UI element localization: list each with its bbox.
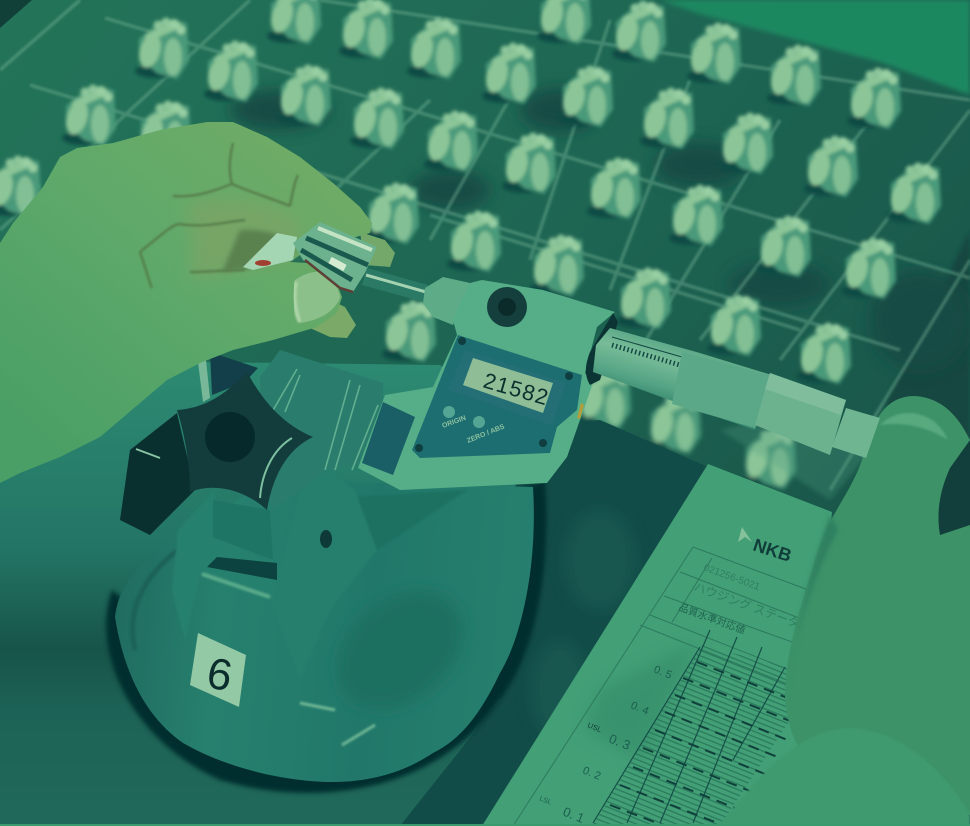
chart hatching — [592, 645, 790, 826]
sleeve scale line — [612, 337, 682, 357]
handle light mark — [136, 449, 160, 458]
micrometer — [243, 222, 880, 490]
inner fold shadow — [222, 230, 295, 272]
tray front lower wall — [720, 410, 880, 500]
side button — [577, 403, 584, 419]
dark shadow around dome — [106, 480, 547, 793]
dome blotch — [314, 567, 486, 733]
digital display panel — [412, 335, 584, 458]
NKB logo: NKB — [751, 535, 794, 566]
thimble tip — [832, 408, 880, 458]
thumb nail edge — [295, 282, 300, 322]
bottom edge strip — [0, 824, 970, 826]
thimble cone — [672, 352, 772, 428]
top left corner dark table — [0, 0, 32, 28]
sleeve — [718, 728, 970, 826]
table mottling — [532, 510, 635, 740]
knob centre recess — [205, 412, 255, 462]
barrel sleeve — [593, 328, 775, 430]
LCD — [463, 358, 553, 413]
dark object at finger — [938, 440, 970, 535]
fingertip shadow — [788, 515, 838, 700]
number tag: 6 — [203, 649, 236, 701]
chart axis labels: USL — [586, 721, 603, 734]
knurled thimble — [755, 373, 846, 455]
dome highlights — [300, 703, 375, 745]
ring finger tip behind knob — [360, 232, 395, 267]
chart axis labels: 0. 2 — [581, 765, 602, 783]
chart axis labels: LSL — [538, 795, 553, 807]
out of focus lower parts — [577, 368, 796, 489]
navy rectangle behind knob — [210, 352, 258, 395]
Japanese form rows: 品質水準対応値 — [677, 601, 747, 637]
stand dome — [115, 480, 534, 782]
notch shadow — [207, 557, 277, 580]
NKB logo — [738, 527, 794, 566]
Japanese form rows: ハウジング ステータ — [692, 580, 801, 631]
micrometer stand — [115, 350, 534, 782]
Japanese form rows — [677, 562, 801, 637]
spindle collar — [423, 277, 470, 325]
notch highlight — [202, 574, 270, 597]
anvil holder white piece — [243, 233, 297, 270]
Japanese form rows: 021256-5021 — [702, 562, 762, 593]
red dot — [255, 260, 271, 266]
dome rim left — [132, 550, 178, 650]
right dark table edge — [885, 230, 970, 440]
main white head — [358, 280, 615, 490]
digital display panel: ZERO / ABS — [466, 423, 506, 445]
paper: inspection chart — [482, 464, 832, 826]
sleeve scale ticks — [612, 345, 690, 368]
table surface left — [0, 362, 540, 826]
locking knob — [487, 287, 527, 327]
top right bright green band — [660, 0, 970, 95]
chart axis labels: 0. 4 — [629, 700, 650, 718]
column screw — [320, 530, 332, 548]
paper shadow — [585, 640, 700, 760]
curled finger shadows — [185, 198, 302, 280]
thimble shading — [765, 373, 846, 415]
parts: array of machined bearings — [0, 0, 941, 384]
star knob — [177, 372, 313, 510]
table surface right — [400, 420, 715, 826]
chart axis labels: 0. 3 — [607, 731, 633, 753]
column body — [270, 470, 377, 680]
tray grid and rods — [0, 0, 970, 490]
knob edge highlight — [260, 438, 292, 498]
chart axis labels — [538, 664, 673, 826]
light strip behind knob — [198, 360, 210, 402]
mottled tray shadows — [230, 88, 970, 370]
ribbed upper block — [260, 350, 383, 510]
left hand — [0, 122, 395, 483]
pinky finger tip — [310, 300, 356, 338]
hand body — [0, 122, 372, 483]
chart grid diagonals — [593, 630, 785, 823]
right hand — [718, 396, 970, 826]
chart frame lines — [513, 547, 830, 826]
upper block ribs — [272, 369, 378, 470]
spindle — [362, 268, 428, 302]
dark side strip — [362, 402, 415, 475]
chart axis labels: 0. 1 — [561, 804, 587, 826]
barrel collar ring — [586, 313, 618, 385]
chart axis labels: 0. 5 — [652, 664, 673, 682]
chart dashes — [610, 662, 790, 826]
digital display panel: ORIGIN — [441, 415, 467, 430]
thumb nail — [293, 272, 340, 323]
finger creases — [140, 143, 298, 288]
number tag — [190, 633, 246, 707]
left column neck — [172, 490, 277, 640]
notch block — [213, 500, 273, 560]
clamp handle — [120, 413, 195, 535]
ratchet knob — [293, 222, 377, 292]
digital display panel: 21582 — [481, 368, 551, 410]
dome body darker facet — [350, 490, 467, 550]
